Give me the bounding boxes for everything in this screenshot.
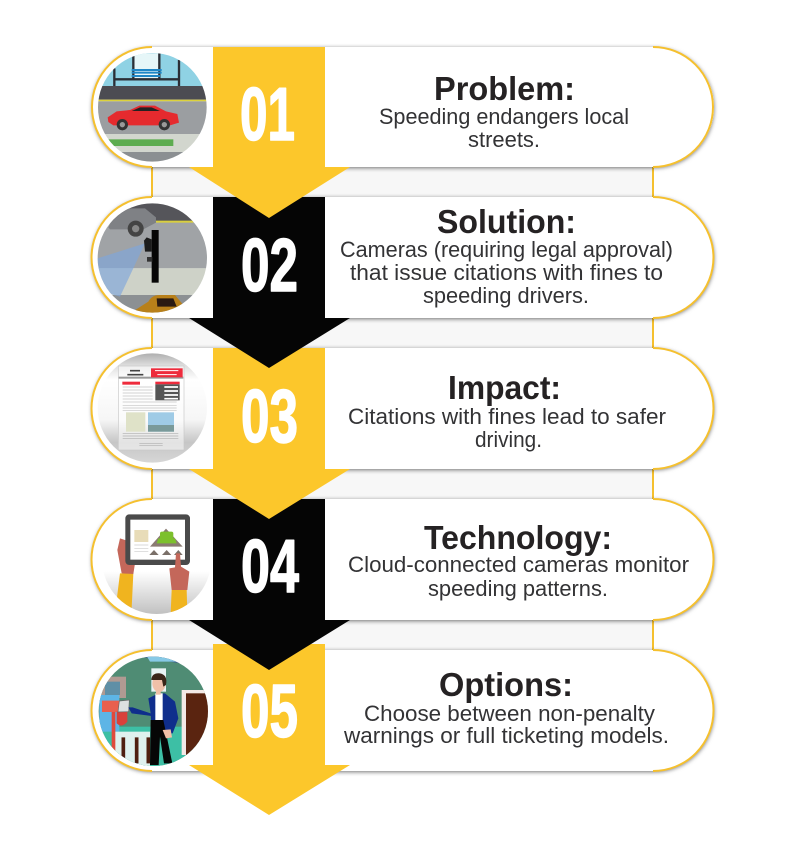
heading: impact: Impact:: [448, 369, 561, 406]
text block: solution: [340, 203, 673, 308]
icon: citation document: [97, 352, 210, 465]
panel: pill 3 background: [91, 348, 714, 469]
text block: problem: Speeding endangers local: [379, 104, 629, 129]
heading: technology: Technology:: [424, 519, 612, 556]
connector lines between pills: [152, 165, 654, 652]
text block: options: warnings or full ticketing models.: [343, 723, 669, 748]
text block: impact: [348, 369, 666, 452]
icon: man at mailbox: [97, 655, 210, 768]
text block: problem: [379, 70, 629, 152]
heading: problem: Problem:: [434, 70, 575, 107]
text block: technology: Cloud-connected cameras monitor: [348, 552, 689, 577]
arrow 3 (yellow): [189, 348, 350, 519]
text block: impact: driving.: [475, 427, 542, 452]
arrow 1 (yellow): [189, 47, 350, 218]
arrow 2 (black): [189, 197, 350, 368]
number 05: 05: [241, 669, 298, 753]
arrow 5 (yellow): [189, 644, 350, 815]
heading: solution: Solution:: [437, 203, 576, 240]
text block: technology: [348, 519, 689, 601]
number 01: 01: [240, 72, 295, 156]
text block: problem: streets.: [468, 127, 540, 152]
panel: pill 4 background: [91, 499, 714, 620]
icon: car on street: [97, 52, 210, 164]
text block: solution: speeding drivers.: [423, 283, 589, 308]
arrow 4 (black): [189, 499, 350, 670]
number 04: 04: [241, 524, 299, 608]
icon: speed camera on pole: [97, 202, 210, 315]
number 03: 03: [241, 374, 298, 458]
text block: options: [343, 666, 669, 748]
heading: options: Options:: [439, 666, 573, 703]
panel: pill 1 background: [92, 47, 714, 167]
number 02: 02: [241, 223, 298, 307]
icon: hands holding tablet: [106, 514, 208, 614]
text block: impact: Citations with fines lead to safer: [348, 404, 666, 429]
text block: solution: Cameras (requiring legal approval): [340, 237, 673, 262]
text block: solution: that issue citations with fines to: [350, 260, 663, 285]
text block: options: Choose between non-penalty: [364, 701, 655, 726]
panel: pill 2 background: [92, 197, 714, 318]
panel: pill 5 background: [91, 650, 714, 771]
text block: technology: speeding patterns.: [428, 576, 608, 601]
